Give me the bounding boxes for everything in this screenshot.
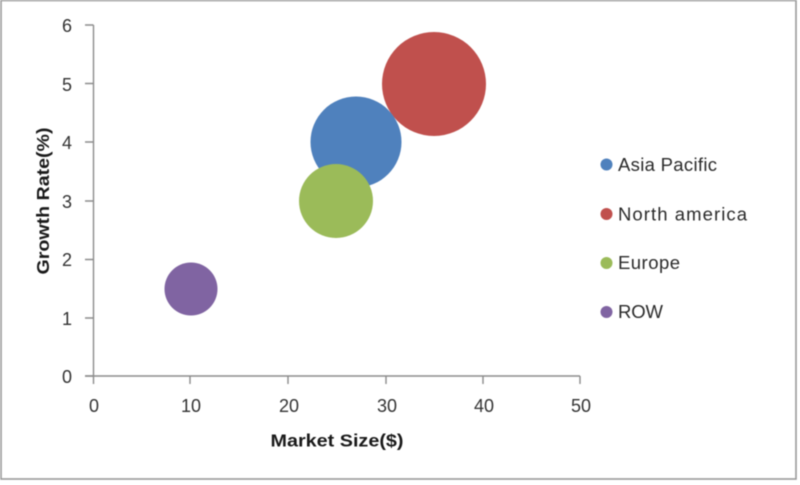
y axis: 3 (62, 192, 72, 212)
y axis title: Growth Rate(%) (33, 128, 53, 274)
bubble: Asia Pacific (310, 96, 402, 188)
y axis: 4 (62, 133, 72, 153)
y axis: 6 (62, 16, 72, 36)
bubble: North america (382, 32, 486, 136)
legend (600, 154, 748, 322)
x axis: 10 (181, 396, 201, 416)
y axis: 2 (62, 250, 72, 270)
y axis: 0 (62, 367, 72, 387)
y axis: 5 (62, 75, 72, 95)
bubble: Europe (299, 164, 373, 238)
y axis: 1 (62, 309, 72, 329)
legend item: ROW: ROW (618, 301, 664, 322)
legend item: Asia Pacific: Asia Pacific (618, 154, 717, 175)
legend item: Europe: Europe (618, 252, 680, 273)
x axis title: Market Size($) (270, 430, 404, 450)
bubble: ROW (164, 262, 218, 316)
x axis: 0 (89, 396, 99, 416)
x axis: 30 (377, 396, 397, 416)
x axis: 40 (474, 396, 494, 416)
y axis (62, 16, 94, 387)
x axis: 50 (571, 396, 591, 416)
legend item: North america: North america (618, 204, 748, 224)
x axis: 20 (279, 396, 299, 416)
x axis (85, 376, 591, 416)
